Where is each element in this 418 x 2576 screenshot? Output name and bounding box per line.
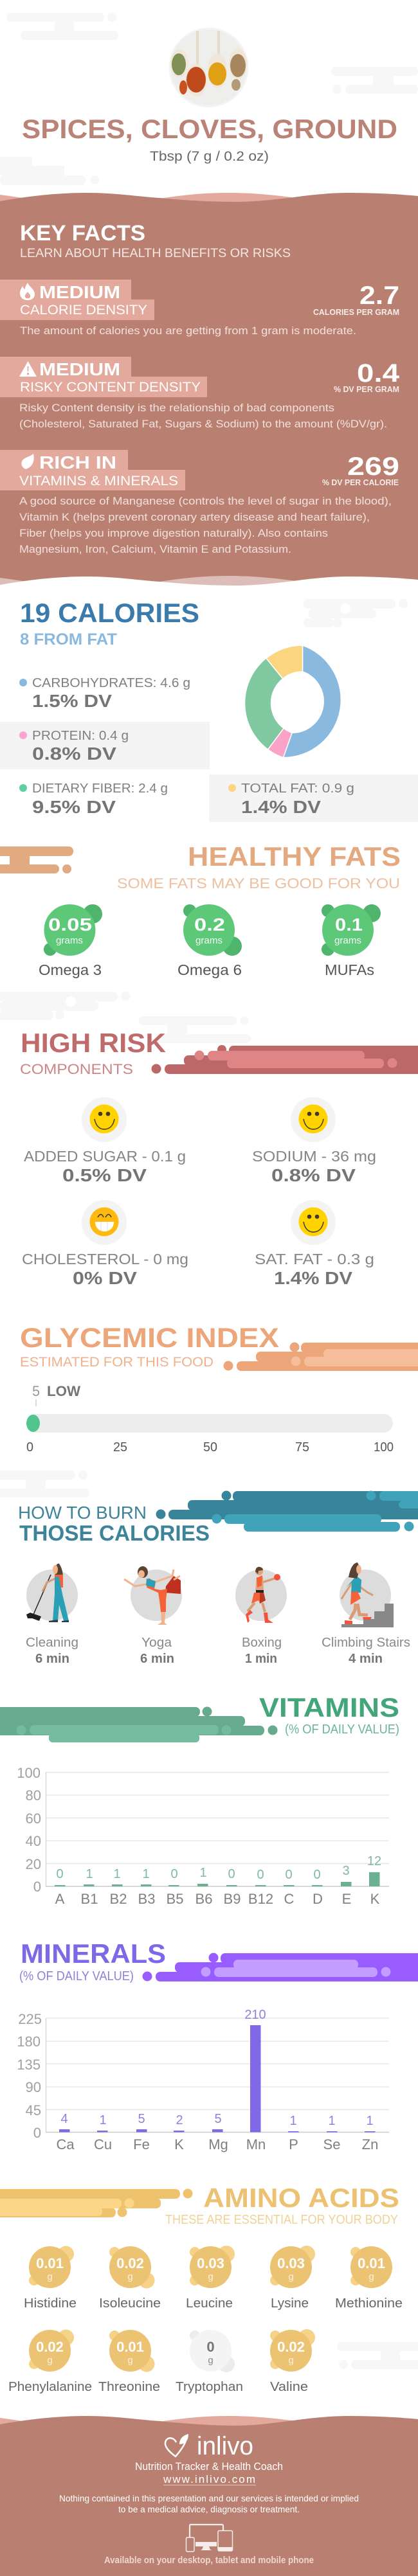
chart: vitamins bar chart: 80 [26,1787,41,1803]
icon: smiley [298,1104,328,1134]
fact: risky content density: Risky Content density is the relationship of bad components [19,402,334,414]
amino: valine: Valine [270,2380,308,2394]
amino: isoleucine: g [127,2271,133,2282]
chart: minerals bar chart: 5 [138,2112,145,2126]
chart: minerals bar chart: 1 [289,2114,297,2128]
chart: vitamins bar chart: 1 [86,1867,93,1881]
chart: minerals bar chart: 135 [17,2057,41,2073]
fat: omega 6: grams [195,935,223,946]
amino: threonine: Threonine [98,2380,160,2394]
heading: those calories: THOSE CALORIES [19,1521,210,1546]
chart: minerals bar chart: 210 [244,2008,266,2022]
fact: rich in vitamins and minerals: Fiber (helps you improve digestion naturally). Also contains [19,527,328,539]
macro: total fat: 1.4% DV [241,797,321,817]
activity: yoga [124,1566,182,1666]
fact: rich in vitamins and minerals: A good source of Manganese (controls the level of sugar in the blood), [19,495,392,507]
heading: amino acids: AMINO ACIDS [203,2183,399,2213]
risk: cholesterol: 0% DV [73,1268,137,1288]
chart: vitamins bar chart: K [370,1891,380,1907]
subheading: vitamins daily value: (% OF DAILY VALUE) [285,1722,399,1737]
risk: saturated fat: SAT. FAT - 0.3 g [255,1251,374,1267]
amino: leucine: 0.03 [197,2255,224,2271]
subheading: minerals daily value: (% OF DAILY VALUE) [19,1969,134,1983]
icon: person in yoga pose [124,1566,181,1625]
icon: warning triangle [19,361,37,377]
chart: minerals bar chart: Mg [208,2136,228,2152]
fact: calorie density: CALORIES PER GRAM [313,307,399,317]
activity: cleaning: Cleaning [26,1636,78,1650]
fact: rich in vitamins and minerals: Magnesium, Iron, Calcium, Vitamin E and Potassium. [19,543,291,555]
chart: vitamins bar chart: B9 [224,1891,241,1907]
amino: methionine [335,2246,403,2311]
macro: carbohydrates [19,676,190,711]
chart: glycemic gauge: 100 [374,1440,394,1454]
subheading: how to burn: HOW TO BURN [18,1503,147,1523]
chart: minerals bar chart: Ca [56,2136,75,2152]
fact: rich in vitamins and minerals [0,450,399,555]
chart: minerals bar chart: K [174,2136,184,2152]
heading: healthy fats: HEALTHY FATS [188,841,401,872]
fact: rich in vitamins and minerals: 269 [347,452,399,481]
macro: protein [0,722,210,769]
chart: glycemic gauge: 75 [295,1440,309,1454]
chart: minerals bar chart: Zn [362,2136,378,2152]
panel: key facts [0,193,418,598]
activity: cleaning: 6 min [35,1652,69,1666]
chart: vitamins bar chart: 40 [26,1833,41,1849]
amino: tryptophan [176,2330,243,2394]
logo: inlivo: inlivo [197,2432,253,2460]
chart: vitamins bar chart: B5 [167,1891,183,1907]
heading: calories: 19 CALORIES [20,598,199,628]
activity: climbing stairs [322,1562,410,1666]
risk: added sugar: ADDED SUGAR - 0.1 g [24,1148,186,1165]
chart: vitamins bar chart: A [55,1891,65,1907]
fact: calorie density: The amount of calories you are getting from 1 gram is moderate. [20,325,356,337]
chart: glycemic gauge: 5 [32,1383,40,1399]
chart: vitamins bar chart: 0 [257,1868,264,1882]
amino: valine [270,2329,315,2394]
fact: calorie density [0,280,399,337]
tagline: Nutrition Tracker & Health Coach [135,2460,283,2473]
chart: vitamins bar chart: 100 [17,1765,41,1781]
chart: minerals bar chart: 45 [26,2102,41,2118]
activity: cleaning [26,1564,78,1666]
fact: rich in vitamins and minerals: VITAMINS & MINERALS [19,474,178,488]
fat: omega 3: Omega 3 [39,962,102,978]
risk: saturated fat [255,1200,374,1288]
amino: lysine: Lysine [271,2296,309,2311]
chart: vitamins bar chart: E [342,1891,351,1907]
activity: climbing stairs: 4 min [349,1652,383,1666]
chart: vitamins bar chart: 1 [113,1867,121,1881]
chart: minerals bar chart: 0 [33,2125,41,2141]
decorative bars: glycemic [224,1342,418,1371]
risk: cholesterol [22,1200,188,1288]
activity: boxing: Boxing [242,1636,282,1650]
fact: risky content density: (Cholesterol, Saturated Fat, Sugars & Sodium) to the amount (%DV/gr). [19,418,387,430]
chart: minerals bar chart: 2 [176,2113,183,2127]
macro: protein: PROTEIN: 0.4 g [32,729,129,743]
amino: leucine [186,2246,235,2311]
macro: protein: 0.8% DV [32,744,116,764]
serving size: Tbsp (7 g / 0.2 oz) [150,149,269,164]
subheading: LEARN ABOUT HEALTH BENEFITS OR RISKS [20,247,291,260]
heading: high risk: HIGH RISK [21,1028,166,1058]
chart: vitamins bar chart: B1 [81,1891,98,1907]
chart: vitamins bar chart: C [284,1891,295,1907]
activity: climbing stairs: Climbing Stairs [322,1636,410,1650]
amino: lysine: 0.03 [277,2255,305,2271]
icon: smiley [298,1207,328,1237]
risk: added sugar [24,1097,186,1185]
subheading: components: COMPONENTS [20,1061,133,1077]
amino: methionine: 0.01 [358,2255,385,2271]
chart: vitamins bar chart: B3 [138,1891,155,1907]
fat: omega 6 [177,904,242,978]
risk: sodium: SODIUM - 36 mg [252,1148,376,1165]
risk: cholesterol: CHOLESTEROL - 0 mg [22,1251,188,1267]
chart: minerals bar chart: 1 [366,2114,374,2128]
activity: boxing: 1 min [245,1652,277,1666]
chart: glycemic gauge: 25 [113,1440,127,1454]
macro: total fat: TOTAL FAT: 0.9 g [241,782,354,796]
chart: vitamins bar chart: 1 [142,1867,150,1881]
amino: tryptophan: 0 [206,2339,215,2355]
decorative bars: vitamins [0,1707,278,1742]
macro: dietary fiber: DIETARY FIBER: 2.4 g [32,782,168,796]
fact: risky content density: MEDIUM [39,359,120,379]
heading: minerals: MINERALS [21,1938,166,1969]
risk: sodium [252,1097,376,1185]
subheading: amino acids: THESE ARE ESSENTIAL FOR YOUR BODY [165,2213,398,2227]
amino: histidine: g [47,2271,53,2282]
chart: minerals bar chart [17,2008,389,2152]
decorative bars: burn calories [156,1491,418,1532]
activity: yoga: 6 min [140,1652,174,1666]
chart: vitamins bar chart: B2 [110,1891,127,1907]
fact: rich in vitamins and minerals: Vitamin K (helps prevent coronary artery disease and heart failure), [19,511,370,523]
icon: smiley [90,1104,118,1134]
fact: risky content density: % DV PER GRAM [334,384,399,394]
activity: boxing [235,1567,287,1666]
amino: leucine: Leucine [186,2296,233,2311]
fat: MUFAs [322,904,381,978]
risk: added sugar: 0.5% DV [62,1165,147,1185]
amino: phenylalanine: g [47,2355,53,2366]
amino: leucine: g [208,2271,214,2282]
chart: minerals bar chart: 90 [26,2079,41,2095]
icon: grinning face [90,1207,118,1237]
fat: omega 6: 0.2 [194,915,225,935]
fat: omega 3: 0.05 [48,915,92,935]
chart: minerals bar chart: Fe [133,2136,150,2152]
fat: MUFAs: MUFAs [325,962,374,978]
macro: carbohydrates: CARBOHYDRATES: 4.6 g [32,676,190,690]
decorative bars: amino acids [0,2189,193,2217]
chart: vitamins bar chart: B12 [248,1891,273,1907]
title: SPICES, CLOVES, GROUND [22,114,397,144]
chart: vitamins bar chart: D [313,1891,323,1907]
fat: omega 3: grams [56,935,83,946]
risk: sodium: 0.8% DV [271,1165,356,1185]
icon: boxer [246,1567,280,1623]
chart: vitamins bar chart: 0 [285,1868,293,1882]
chart: vitamins bar chart: 3 [342,1864,350,1878]
amino: histidine [24,2246,77,2311]
image: spices on spoons [168,28,248,107]
subheading: healthy fats: SOME FATS MAY BE GOOD FOR YOU [117,875,400,891]
chart: minerals bar chart: 180 [17,2034,41,2050]
chart: vitamins bar chart: 0 [56,1867,64,1881]
fact: calorie density: 2.7 [359,282,399,310]
activity: yoga: Yoga [141,1636,172,1650]
amino: phenylalanine: 0.02 [36,2339,64,2355]
amino: histidine: 0.01 [36,2255,64,2271]
heading: vitamins: VITAMINS [259,1692,399,1722]
icon: devices [186,2525,233,2552]
amino: isoleucine [99,2246,161,2311]
macro: carbohydrates: 1.5% DV [32,691,112,711]
chart: minerals bar chart: Mn [246,2136,266,2152]
fat: omega 6: Omega 6 [177,962,242,978]
chart: minerals bar chart: 5 [214,2112,222,2126]
chart: vitamins bar chart: 0 [313,1868,321,1882]
chart: minerals bar chart: Cu [94,2136,112,2152]
heading: glycemic index: GLYCEMIC INDEX [20,1323,279,1354]
fact: rich in vitamins and minerals: RICH IN [39,452,116,472]
chart: vitamins bar chart: 0 [170,1867,178,1881]
chart: minerals bar chart: Se [323,2136,340,2152]
chart: macronutrient donut [245,645,341,758]
decorative bars: high risk [152,1045,418,1074]
icon: leaf [21,454,34,469]
chart: glycemic gauge: LOW [47,1383,80,1399]
fact: risky content density [0,357,400,430]
website link: www.inlivo.com [163,2473,255,2485]
chart: glycemic gauge: 50 [203,1440,217,1454]
icon: person on stairs [341,1562,394,1627]
macro: total fat [209,774,418,822]
logo: inlivo [165,2432,253,2460]
macro: dietary fiber: 9.5% DV [32,797,116,817]
chart: vitamins bar chart: 0 [228,1867,235,1881]
chart: minerals bar chart: P [289,2136,298,2152]
macro: dietary fiber [19,782,168,817]
availability note: Available on your desktop, tablet and mobile phone [104,2555,314,2566]
amino: tryptophan: g [208,2355,214,2366]
amino: tryptophan: Tryptophan [176,2380,243,2394]
footer panel [0,2416,418,2576]
chart: minerals bar chart: 4 [60,2112,68,2126]
decorative bars: minerals [143,1953,418,1981]
fat: MUFAs: grams [334,935,361,946]
amino: threonine: g [127,2355,133,2366]
chart: vitamins bar chart: 1 [199,1866,207,1880]
subheading: from fat: 8 FROM FAT [20,631,117,648]
amino: valine: g [288,2355,294,2366]
amino: isoleucine: Isoleucine [99,2296,161,2311]
subheading: estimated: ESTIMATED FOR THIS FOOD [20,1355,214,1370]
chart: vitamins bar chart [17,1765,389,1907]
chart: vitamins bar chart: 12 [367,1854,381,1868]
fat: MUFAs: 0.1 [335,915,363,935]
amino: valine: 0.02 [277,2339,305,2355]
fact: risky content density: RISKY CONTENT DENSITY [20,380,201,395]
disclaimer: to be a medical advice, diagnosis or treatment. [118,2504,300,2514]
amino: lysine: g [288,2271,294,2282]
amino: isoleucine: 0.02 [116,2255,144,2271]
chart: vitamins bar chart: B6 [195,1891,212,1907]
fact: rich in vitamins and minerals: % DV PER CALORIE [322,478,399,487]
chart: vitamins bar chart: 60 [26,1811,41,1827]
amino: lysine [270,2246,315,2311]
chart: glycemic gauge [26,1383,394,1454]
amino: threonine [98,2330,160,2394]
amino: phenylalanine: Phenylalanine [8,2380,92,2394]
amino: phenylalanine [8,2329,92,2394]
risk: saturated fat: 1.4% DV [274,1268,352,1288]
fact: calorie density: MEDIUM [39,282,120,302]
amino: methionine: g [368,2271,374,2282]
amino: threonine: 0.01 [116,2339,144,2355]
chart: minerals bar chart: 1 [328,2114,336,2128]
chart: vitamins bar chart: 20 [26,1856,41,1872]
icon: person sweeping [26,1564,69,1622]
heading: key facts: KEY FACTS [20,221,145,246]
icon: flame [20,283,35,300]
disclaimer: Nothing contained in this presentation and our services is intended or implied [59,2493,359,2503]
disclaimer [59,2493,359,2514]
chart: minerals bar chart: 1 [99,2113,107,2127]
chart: vitamins bar chart: 0 [33,1879,41,1895]
amino: histidine: Histidine [24,2296,77,2311]
chart: glycemic gauge: 0 [26,1440,33,1454]
fat: omega 3 [39,904,102,978]
amino: methionine: Methionine [335,2296,403,2311]
chart: minerals bar chart: 225 [18,2011,42,2027]
fact: calorie density: CALORIE DENSITY [20,303,147,318]
fact: risky content density: 0.4 [357,359,400,388]
